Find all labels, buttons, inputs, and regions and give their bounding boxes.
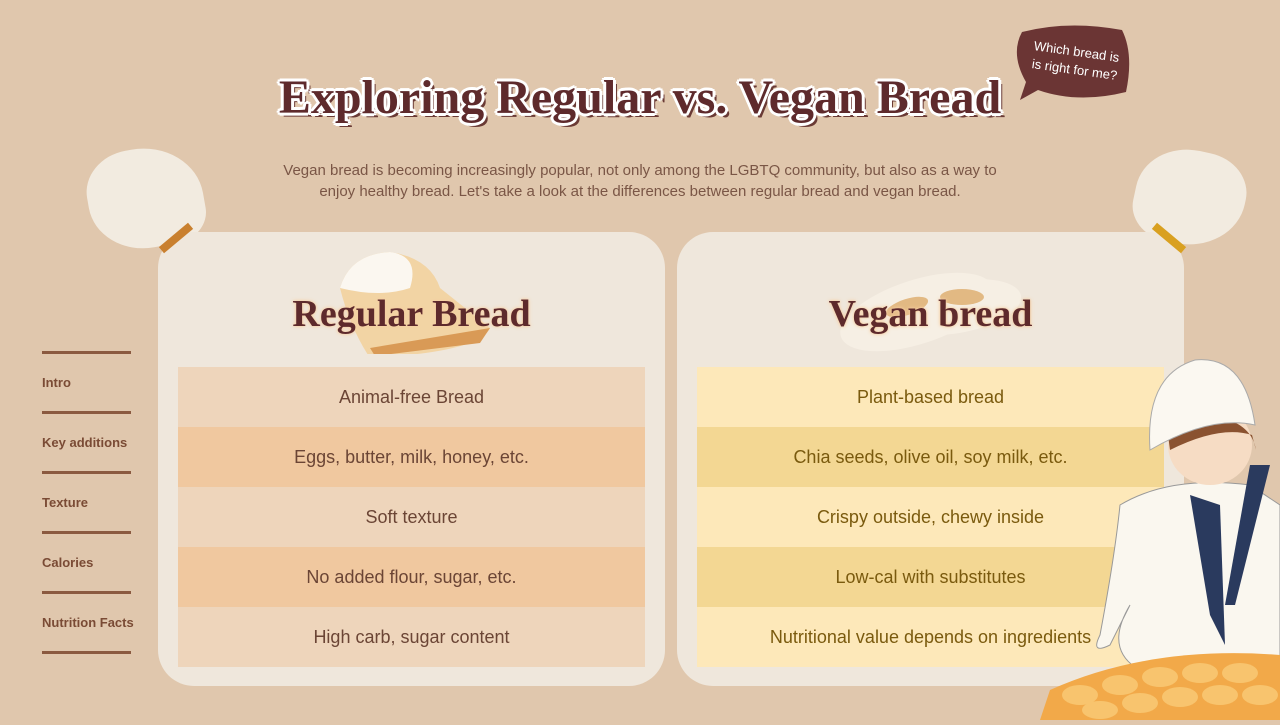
nav: left sections: Key additions bbox=[42, 435, 127, 450]
heading: Regular Bread: Regular Bread bbox=[292, 293, 531, 335]
decorative blob right bbox=[1126, 140, 1254, 255]
table: regular: Eggs, butter, milk, honey, etc. bbox=[294, 446, 529, 466]
decorative blob left bbox=[80, 139, 211, 257]
nav: left sections: Calories bbox=[42, 555, 93, 570]
illustration: chef with bread bbox=[1040, 359, 1280, 720]
table: vegan: Low-cal with substitutes bbox=[835, 566, 1026, 586]
nav: left sections bbox=[42, 351, 134, 654]
table: vegan: Plant-based bread bbox=[857, 386, 1004, 406]
tape left bbox=[159, 223, 193, 253]
table: regular: Animal-free Bread bbox=[339, 386, 484, 406]
title: Exploring Regular vs. Vegan Bread bbox=[279, 71, 1001, 124]
table: regular: Soft texture bbox=[365, 506, 458, 526]
table: vegan bbox=[697, 367, 1164, 667]
tape right bbox=[1152, 223, 1186, 253]
table: vegan: Chia seeds, olive oil, soy milk, etc. bbox=[793, 446, 1068, 466]
nav: left sections: Nutrition Facts bbox=[42, 615, 134, 630]
table: regular: No added flour, sugar, etc. bbox=[306, 566, 517, 586]
table: regular bbox=[178, 367, 645, 667]
icon: bread loaf bbox=[340, 252, 490, 354]
nav: left sections: Intro bbox=[42, 375, 71, 390]
nav: left sections: Texture bbox=[42, 495, 88, 510]
subtitle: enjoy healthy bread. Let's take a look at the differences between regular bread and vegan bread. bbox=[319, 183, 961, 200]
speech bubble bbox=[1016, 26, 1130, 100]
table: vegan: Crispy outside, chewy inside bbox=[817, 506, 1044, 526]
icon: baguettes bbox=[886, 289, 984, 317]
subtitle: Vegan bread is becoming increasingly popular, not only among the LGBTQ community, but also as a way to bbox=[283, 162, 997, 179]
speech bubble: is right for me? bbox=[1031, 56, 1118, 83]
speech bubble: Which bread is bbox=[1033, 38, 1121, 65]
heading: Vegan bread: Vegan bread bbox=[829, 293, 1032, 335]
panel: regular bread bbox=[158, 232, 665, 686]
table: regular: High carb, sugar content bbox=[313, 626, 510, 646]
table: vegan: Nutritional value depends on ingredients bbox=[770, 626, 1091, 646]
subtitle bbox=[283, 162, 997, 200]
panel: vegan bread bbox=[677, 232, 1184, 686]
